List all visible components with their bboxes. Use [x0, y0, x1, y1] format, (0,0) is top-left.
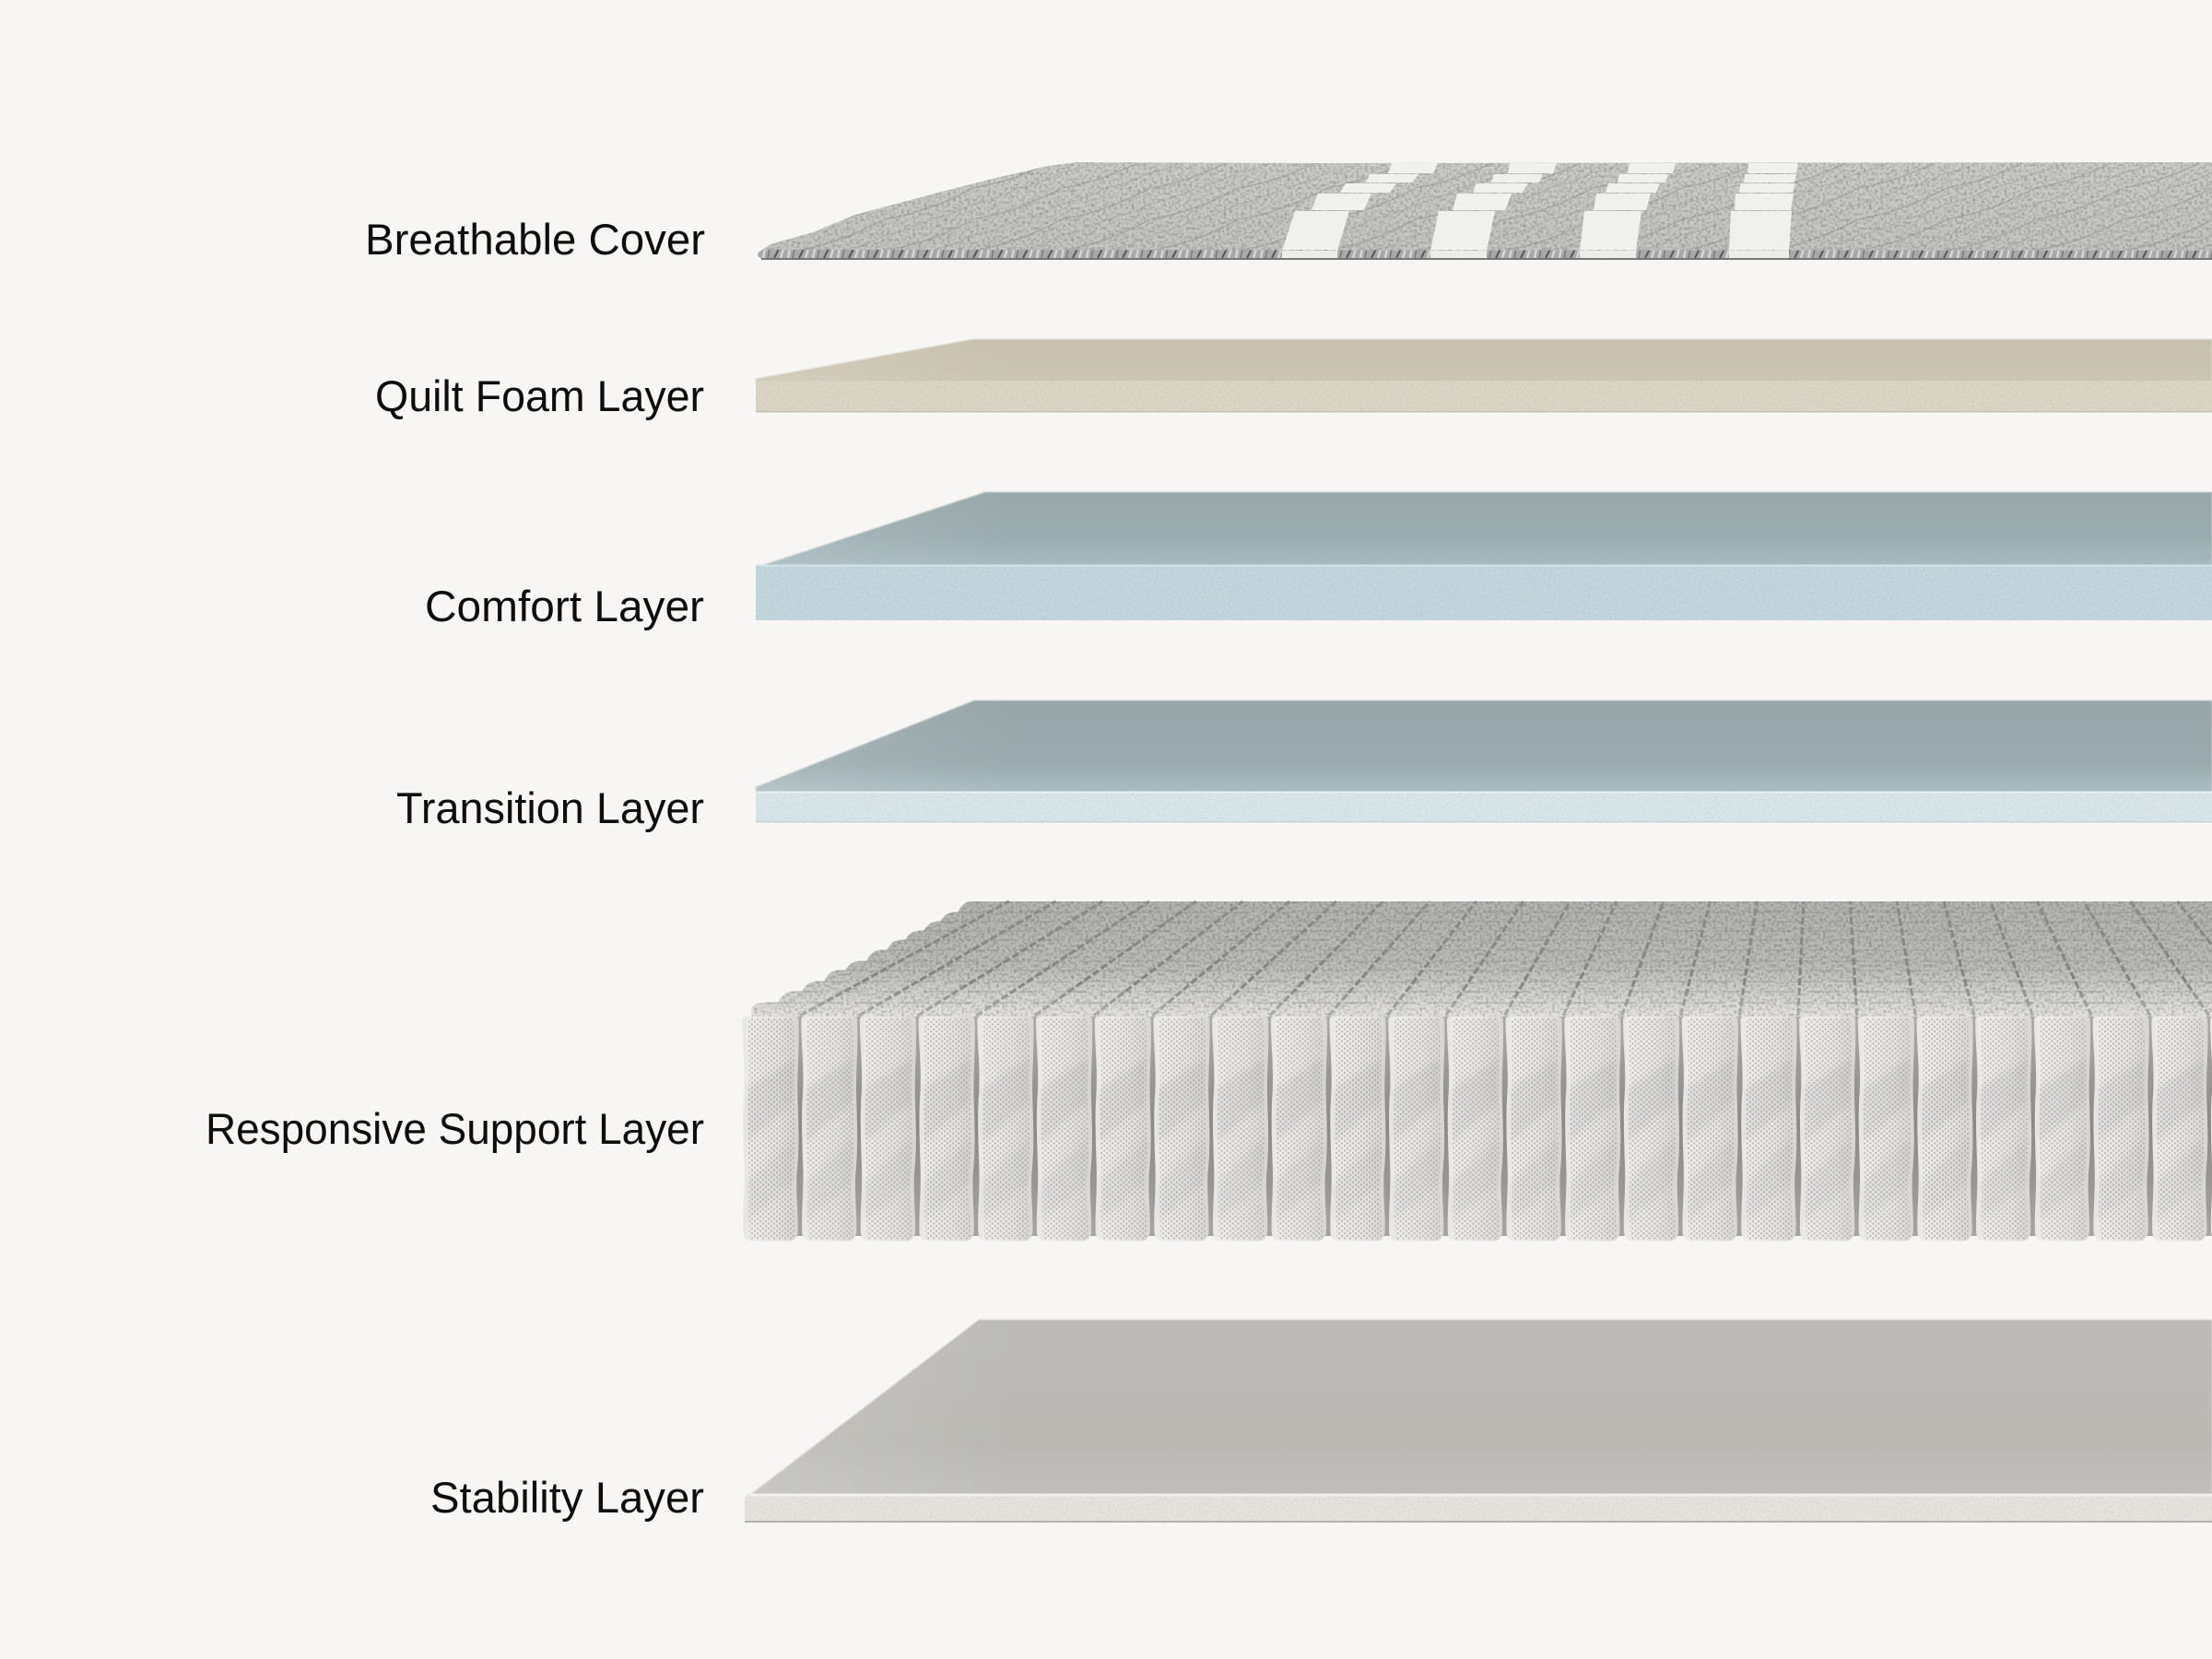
stability bottom edge	[745, 1521, 2212, 1523]
comfort front face	[756, 566, 2212, 620]
transition top face left highlight	[756, 700, 1060, 793]
stability front face	[745, 1495, 2212, 1522]
label: Comfort Layer: Comfort Layer	[425, 582, 704, 630]
label: Stability Layer: Stability Layer	[430, 1473, 704, 1522]
quilt foam bottom edge	[756, 411, 2212, 413]
pocket coil column lines	[800, 901, 2212, 1016]
label: Breathable Cover: Breathable Cover	[365, 215, 705, 264]
label: Quilt Foam Layer: Quilt Foam Layer	[375, 371, 704, 420]
layer: Transition Layer	[396, 700, 2212, 832]
layer: Stability Layer	[430, 1320, 2212, 1523]
quilt foam top face	[756, 339, 2212, 382]
transition top face	[756, 700, 2212, 793]
transition bottom edge	[756, 821, 2212, 822]
cover white stripes	[1282, 163, 1798, 251]
cover piped edge	[758, 250, 2212, 259]
pocket coil front columns	[743, 1017, 2212, 1241]
pocket coil front gaps	[748, 1017, 2212, 1236]
transition front face	[756, 793, 2212, 822]
stability top face left highlight	[751, 1320, 1060, 1496]
cover edge bottom line	[761, 258, 2212, 260]
cover quilting lines	[783, 163, 2212, 251]
pocket coil top surface	[751, 901, 2212, 1018]
transition front highlight	[756, 791, 2212, 793]
comfort top face	[763, 492, 2212, 567]
label: Transition Layer: Transition Layer	[396, 783, 704, 832]
quilt foam front face	[756, 381, 2212, 412]
quilt foam top face left highlight	[756, 339, 1060, 381]
layer: Quilt Foam Layer	[375, 339, 2212, 420]
layer: Comfort Layer	[425, 492, 2212, 630]
layer: Responsive Support Layer	[206, 901, 2212, 1241]
stability front highlight	[748, 1493, 2212, 1497]
cover top surface	[759, 162, 2212, 253]
layer: Breathable Cover	[365, 162, 2212, 264]
pocket coil row lines	[765, 912, 2212, 1003]
comfort front highlight	[756, 564, 2212, 566]
label: Responsive Support Layer: Responsive Support Layer	[206, 1104, 704, 1153]
comfort top face left highlight	[763, 492, 1060, 567]
cover edge white stripe segments	[1282, 251, 1789, 258]
stability top face	[751, 1320, 2212, 1496]
